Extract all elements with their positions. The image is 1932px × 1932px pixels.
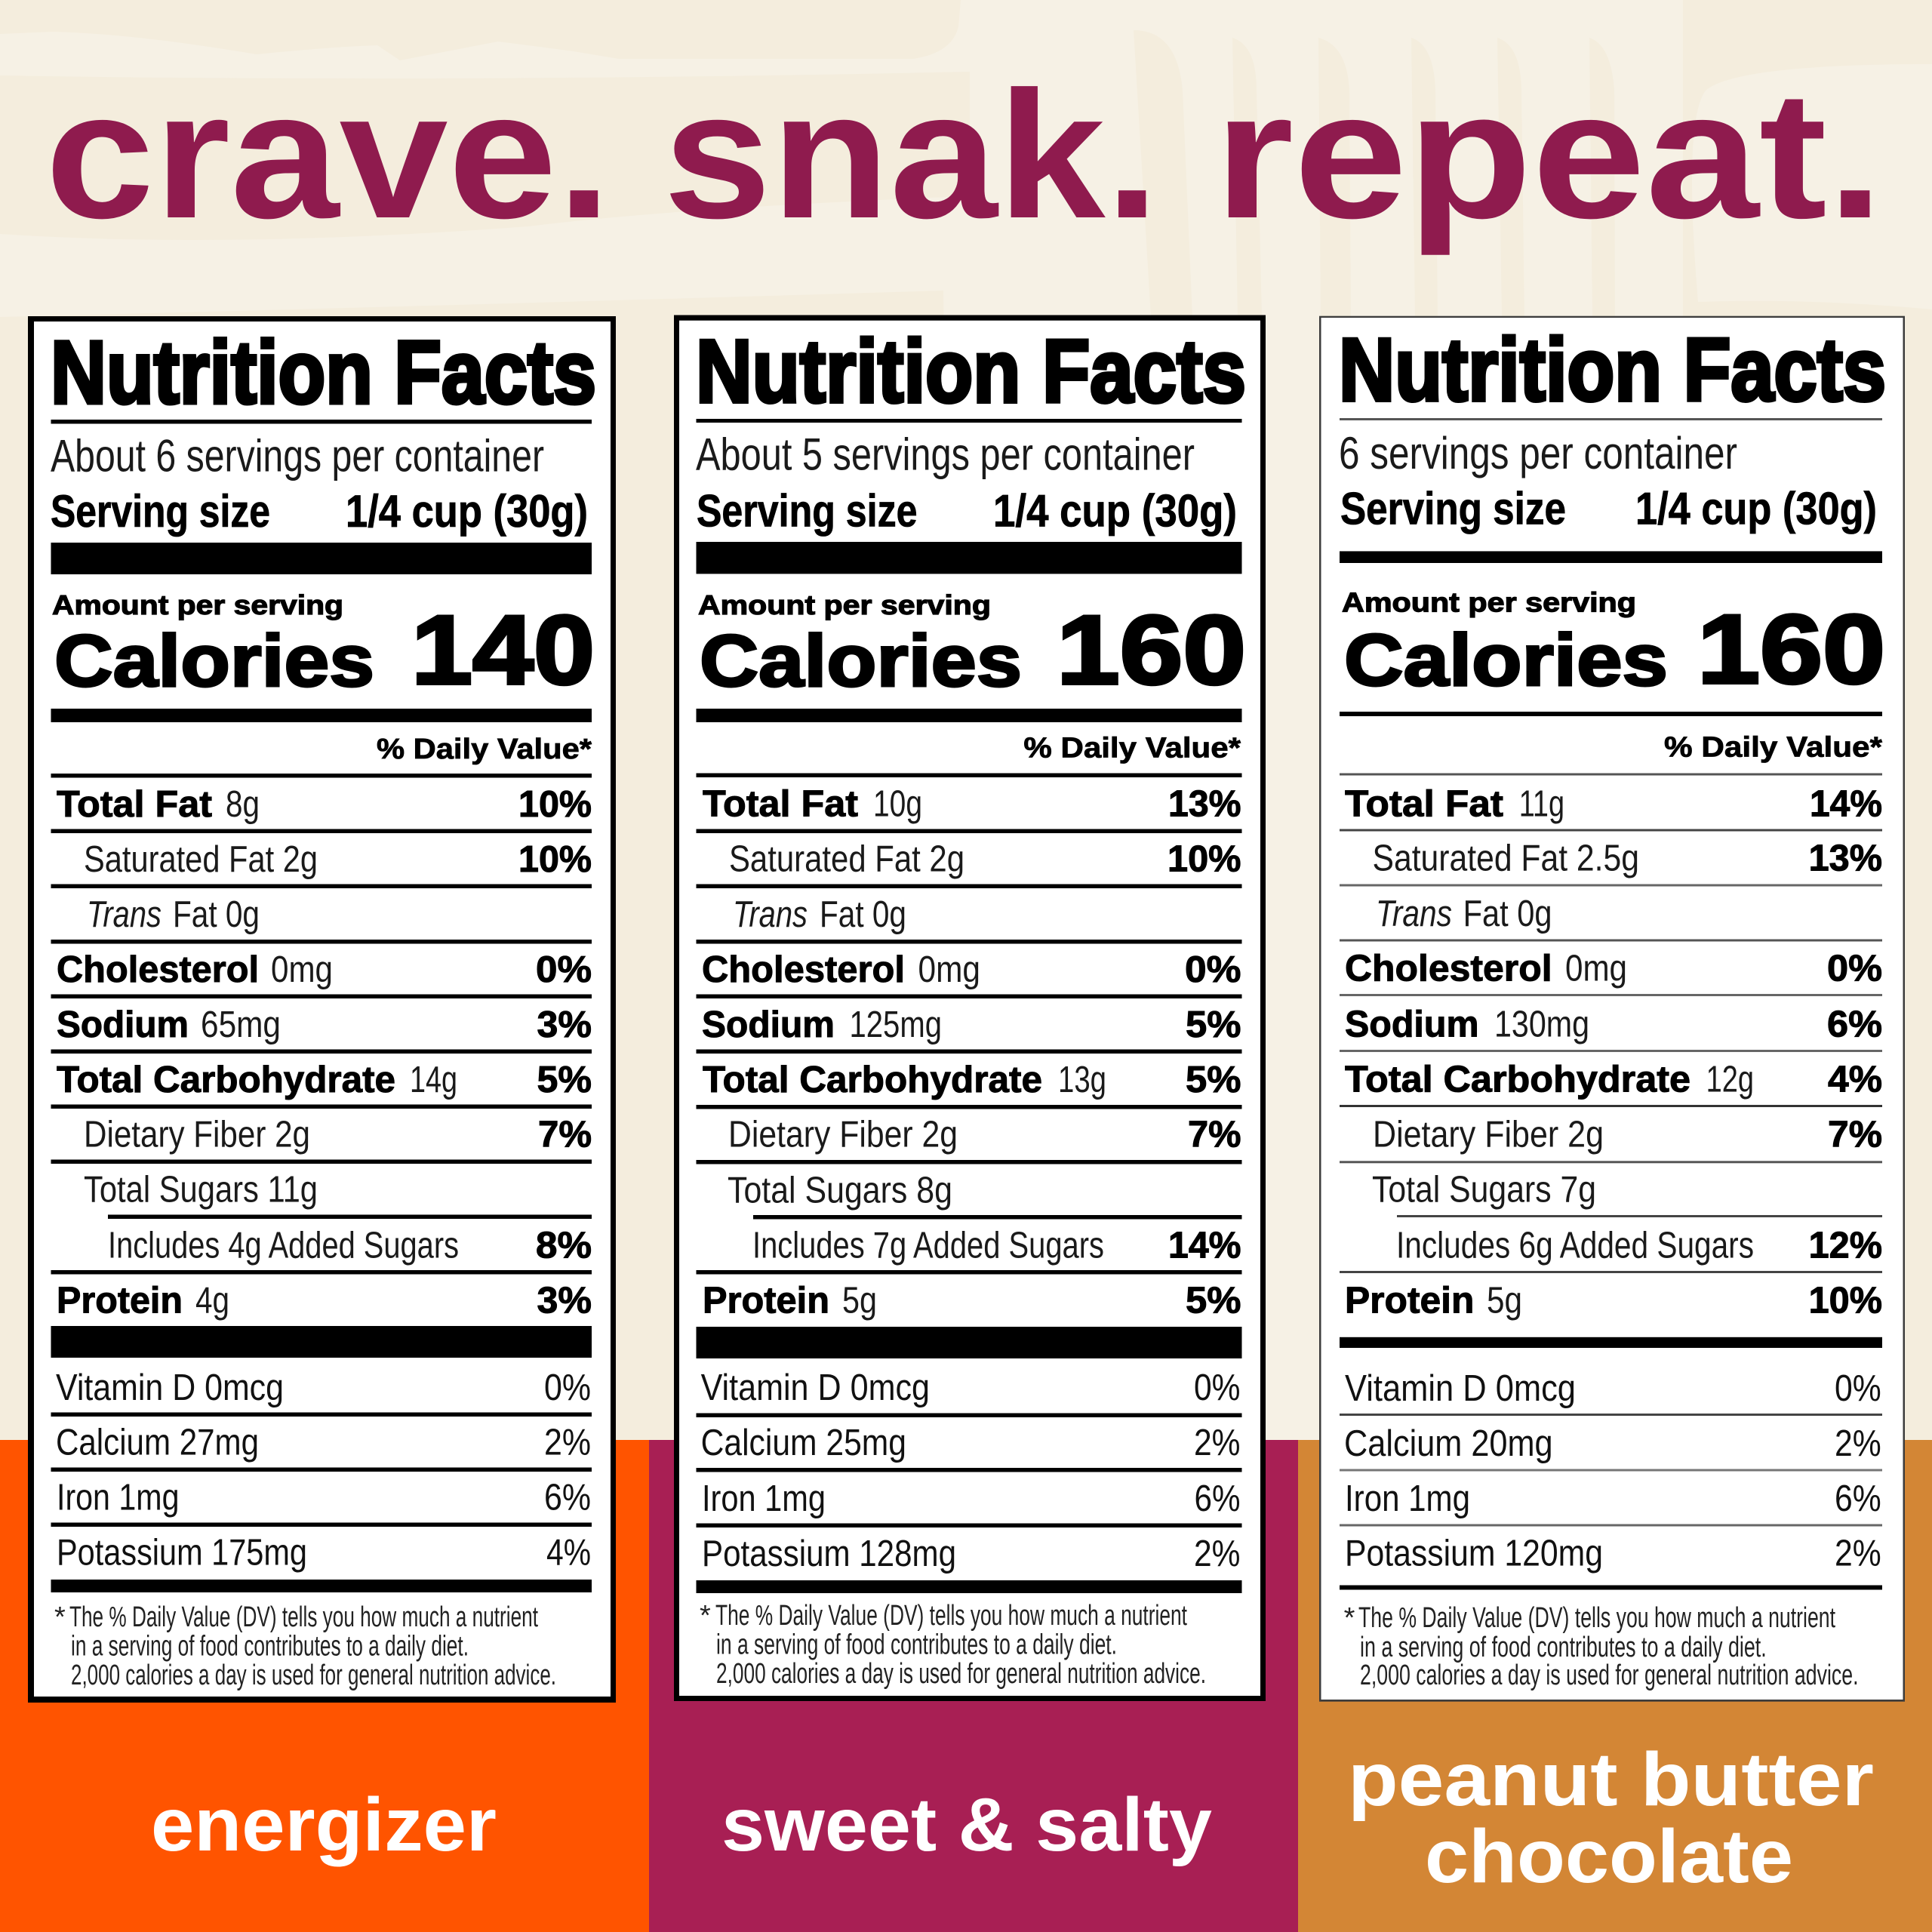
vitamins and minerals: Iron 1mg (57, 1478, 180, 1518)
serving information: Serving size (51, 486, 270, 537)
panel: energizer nutrition facts (28, 316, 616, 1703)
nutrient rows: Total Fat (57, 784, 212, 825)
nutrient rows: 5% (1186, 1280, 1241, 1321)
vitamins and minerals: Vitamin D 0mcg (701, 1367, 930, 1408)
title: repeat. (1214, 54, 1884, 256)
nutrient rows: Trans (87, 894, 162, 935)
nutrient rows: 125mg (850, 1004, 942, 1045)
footnote: 2,000 calories a day is used for general nutrition advice. (716, 1658, 1206, 1690)
calories (51, 589, 595, 777)
nutrient rows: 5% (1186, 1060, 1241, 1100)
nutrient rows: Includes 7g Added Sugars (752, 1226, 1104, 1266)
calories: Calories (700, 620, 1022, 702)
footnote: in a serving of food contributes to a daily diet. (716, 1629, 1117, 1660)
nutrient rows: 5% (537, 1060, 592, 1100)
nutrient rows (51, 784, 592, 1358)
panel: peanut butter chocolate nutrition facts (1319, 316, 1905, 1702)
nutrient rows: 10g (873, 783, 922, 824)
nutrient rows (696, 783, 1242, 1358)
footnote: * (1344, 1602, 1355, 1634)
footnote: 2,000 calories a day is used for general nutrition advice. (71, 1660, 556, 1691)
vitamins and minerals: 2% (1835, 1534, 1881, 1574)
vitamins and minerals: Calcium 25mg (701, 1423, 906, 1463)
nutrient rows: 13g (1058, 1060, 1106, 1100)
band: sweet and salty magenta (649, 1440, 1298, 1932)
nutrient rows: 13% (1168, 783, 1241, 824)
nutrient rows: Fat 0g (173, 894, 260, 935)
nutrient rows: Fat 0g (1463, 894, 1552, 934)
nutrient rows: 0% (1185, 949, 1241, 990)
nutrient rows: 14% (1810, 783, 1882, 824)
vitamins and minerals: Vitamin D 0mcg (56, 1367, 284, 1408)
nutrient rows: Sodium (1345, 1004, 1479, 1044)
band: energizer orange (0, 1440, 649, 1932)
nutrient rows: 12% (1809, 1226, 1882, 1266)
calories: Amount per serving (698, 589, 991, 620)
heading: Nutrition Facts: Nutrition Facts (696, 321, 1246, 421)
nutrient rows: 14g (410, 1060, 457, 1100)
title: snak. (663, 54, 1159, 256)
calories: Amount per serving (52, 589, 343, 620)
nutrient rows: Fat 0g (820, 894, 906, 935)
calories (1340, 587, 1885, 776)
label: peanut butter chocolate: chocolate (1425, 1814, 1793, 1899)
nutrient rows: Includes 6g Added Sugars (1396, 1226, 1754, 1266)
nutrient rows: Total Sugars 11g (84, 1170, 318, 1211)
nutrient rows: 0% (536, 949, 592, 990)
vitamins and minerals: 6% (544, 1478, 591, 1518)
heading: Nutrition Facts: Nutrition Facts (51, 323, 596, 423)
nutrient rows: Saturated Fat 2g (729, 839, 964, 880)
nutrient rows: 7% (1828, 1114, 1882, 1155)
vitamins and minerals: 6% (1835, 1478, 1881, 1519)
nutrient rows: 11g (1519, 783, 1564, 824)
nutrient rows: Dietary Fiber 2g (84, 1114, 310, 1155)
footnote: The % Daily Value (DV) tells you how much a nutrient (715, 1600, 1187, 1632)
nutrient rows: Protein (57, 1280, 183, 1321)
nutrient rows: Trans (733, 894, 808, 935)
calories: % Daily Value* (377, 734, 592, 765)
nutrient rows: 8g (226, 784, 260, 825)
vitamins and minerals (51, 1367, 592, 1592)
label: peanut butter chocolate (1348, 1737, 1874, 1899)
footnote: The % Daily Value (DV) tells you how much a nutrient (69, 1601, 538, 1633)
nutrient rows: Saturated Fat 2.5g (1372, 838, 1639, 878)
band: peanut butter chocolate tan (1298, 1440, 1932, 1932)
nutrient rows: 0% (1827, 948, 1882, 989)
calories: 160 (1057, 595, 1246, 705)
calories (696, 589, 1246, 777)
nutrient rows: Sodium (57, 1004, 189, 1045)
calories: % Daily Value* (1664, 732, 1882, 764)
calories: Calories (1344, 619, 1668, 701)
nutrient rows: 10% (1168, 839, 1241, 880)
vitamins and minerals: Iron 1mg (1345, 1478, 1470, 1519)
footnote: * (700, 1600, 711, 1632)
vitamins and minerals: Potassium 120mg (1345, 1534, 1603, 1574)
vitamins and minerals: 0% (544, 1367, 591, 1408)
nutrient rows: Dietary Fiber 2g (728, 1114, 958, 1155)
nutrient rows: 3% (537, 1004, 592, 1045)
calories: 160 (1697, 594, 1885, 704)
nutrient rows: 6% (1827, 1004, 1882, 1044)
vitamins and minerals: 2% (1835, 1423, 1881, 1464)
footnote: in a serving of food contributes to a daily diet. (1360, 1632, 1767, 1663)
calories: 140 (411, 595, 595, 705)
serving information: 1/4 cup (30g) (1635, 484, 1877, 534)
nutrient rows: 5% (1186, 1004, 1241, 1045)
calories: Calories (54, 620, 374, 702)
footnote: * (54, 1601, 66, 1633)
vitamins and minerals: Iron 1mg (702, 1478, 826, 1519)
nutrient rows: Total Fat (1345, 783, 1503, 824)
nutrient rows: Total Sugars 8g (728, 1170, 952, 1211)
nutrient rows: 12g (1706, 1060, 1754, 1100)
nutrient rows (1340, 783, 1882, 1348)
vitamins and minerals: 2% (544, 1422, 591, 1463)
calories: % Daily Value* (1023, 732, 1241, 764)
vitamins and minerals: Calcium 20mg (1344, 1423, 1553, 1464)
vitamins and minerals (1340, 1368, 1882, 1589)
label: sweet and salty: sweet & salty (721, 1783, 1212, 1867)
nutrient rows: 0mg (271, 949, 333, 990)
vitamins and minerals: Potassium 128mg (702, 1534, 956, 1574)
serving information: 6 servings per container (1339, 428, 1737, 478)
nutrient rows: 7% (1188, 1114, 1241, 1155)
vitamins and minerals: 0% (1194, 1367, 1241, 1408)
title (45, 54, 1884, 256)
nutrient rows: Protein (1345, 1280, 1474, 1321)
nutrient rows: 3% (537, 1280, 592, 1321)
nutrient rows: 130mg (1494, 1004, 1589, 1044)
nutrient rows: 65mg (201, 1004, 281, 1045)
vitamins and minerals: 6% (1194, 1478, 1241, 1519)
nutrient rows: Trans (1376, 894, 1452, 934)
vitamins and minerals: Vitamin D 0mcg (1345, 1368, 1576, 1409)
nutrient rows: Includes 4g Added Sugars (108, 1226, 459, 1266)
footnote: in a serving of food contributes to a daily diet. (71, 1630, 469, 1662)
nutrient rows: 5g (1487, 1280, 1522, 1321)
serving information: About 6 servings per container (51, 430, 544, 481)
vitamins and minerals: 2% (1194, 1423, 1241, 1463)
nutrient rows: 10% (518, 784, 592, 825)
title: crave. (45, 54, 611, 256)
nutrient rows: Total Carbohydrate (703, 1060, 1042, 1100)
nutrient rows: 5g (842, 1280, 877, 1321)
serving information: Serving size (697, 485, 918, 536)
nutrient rows: Total Carbohydrate (1345, 1060, 1690, 1100)
nutrient rows: Total Carbohydrate (57, 1060, 395, 1100)
panel: sweet and salty nutrition facts (674, 315, 1266, 1701)
vitamins and minerals: Calcium 27mg (56, 1422, 259, 1463)
footnote (700, 1600, 1206, 1690)
footnote (54, 1601, 556, 1691)
nutrient rows: 4% (1828, 1060, 1882, 1100)
footnote (1344, 1602, 1858, 1691)
nutrient rows: 0mg (918, 949, 980, 990)
nutrient rows: 10% (1809, 1280, 1882, 1321)
serving information: 1/4 cup (30g) (346, 486, 588, 537)
nutrient rows: Cholesterol (57, 949, 259, 990)
serving information (696, 419, 1242, 574)
vitamins and minerals: 2% (1194, 1534, 1241, 1574)
vitamins and minerals (696, 1367, 1242, 1593)
nutrient rows: 8% (536, 1226, 592, 1266)
vitamins and minerals: 0% (1835, 1368, 1881, 1409)
label: peanut butter chocolate: peanut butter (1348, 1737, 1874, 1822)
serving information: Serving size (1340, 484, 1566, 534)
serving information: 1/4 cup (30g) (993, 485, 1237, 536)
nutrient rows: Cholesterol (1345, 948, 1552, 989)
nutrient rows: Sodium (702, 1004, 835, 1045)
nutrient rows: 10% (518, 839, 592, 880)
nutrient rows: Total Fat (703, 783, 858, 824)
vitamins and minerals: 4% (546, 1532, 591, 1573)
nutrient rows: Dietary Fiber 2g (1373, 1114, 1604, 1155)
calories: Amount per serving (1342, 587, 1636, 618)
label: energizer: energizer (151, 1783, 497, 1867)
nutrient rows: Cholesterol (702, 949, 905, 990)
nutrient rows: 13% (1809, 838, 1882, 878)
nutrient rows: Total Sugars 7g (1372, 1170, 1596, 1211)
nutrient rows: 14% (1168, 1226, 1241, 1266)
nutrient rows: 7% (538, 1114, 592, 1155)
vitamins and minerals: Potassium 175mg (57, 1532, 307, 1573)
serving information: About 5 servings per container (696, 429, 1195, 480)
nutrient rows: 4g (195, 1280, 229, 1321)
nutrient rows: Protein (703, 1280, 829, 1321)
nutrient rows: 0mg (1565, 948, 1627, 989)
serving information (51, 420, 592, 574)
serving information (1339, 418, 1882, 563)
nutrient rows: Saturated Fat 2g (84, 839, 318, 880)
